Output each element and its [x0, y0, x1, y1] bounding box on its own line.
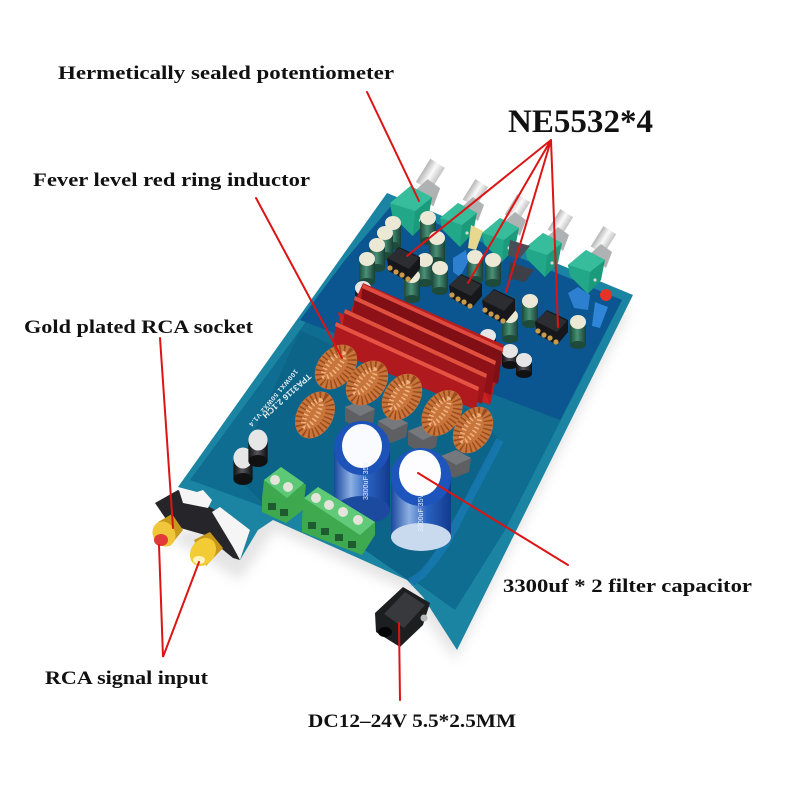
- label: DC jack: DC12–24V 5.5*2.5MM: [308, 711, 516, 732]
- filter capacitors: 3300uF 35V: [363, 462, 370, 500]
- RCA sockets: [148, 487, 250, 571]
- label: potentiometer: Hermetically sealed potentiometer: [58, 63, 395, 84]
- board shadow: [165, 300, 630, 660]
- arrow: inductor: [256, 198, 342, 358]
- filter capacitors: 3300uF 35V: [418, 494, 425, 532]
- silkscreen text: TPA3116 2.1CH: [261, 372, 313, 420]
- arrow: RCA signal input: [159, 545, 199, 657]
- label: filter capacitor: 3300uf * 2 filter capacitor: [503, 576, 753, 597]
- black capacitors: [233, 281, 532, 485]
- silkscreen text: 100WX1 50WX2 V1.4: [247, 368, 299, 428]
- arrow: potentiometer: [367, 92, 419, 201]
- arrow: RCA socket: [160, 338, 173, 528]
- label: NE5532 chips: NE5532*4: [508, 104, 653, 140]
- copper inductors: [287, 336, 502, 461]
- arrow: DC jack: [399, 623, 400, 700]
- DC jack: [375, 587, 430, 647]
- red heatsink: [332, 283, 504, 410]
- arrow: filter capacitor: [418, 473, 568, 565]
- PCB board: [178, 193, 633, 650]
- label: inductor: Fever level red ring inductor: [33, 170, 311, 191]
- potentiometers: [390, 159, 616, 294]
- red callout arrows: [159, 92, 568, 700]
- green terminal blocks: [262, 467, 375, 555]
- label: RCA socket: Gold plated RCA socket: [24, 317, 254, 338]
- film capacitors and LED: [453, 240, 612, 328]
- chokes: [345, 401, 471, 478]
- label: RCA signal input: RCA signal input: [45, 668, 209, 689]
- filter capacitors: [334, 421, 451, 551]
- arrow: chips: [407, 140, 558, 327]
- preamp capacitors: [359, 211, 586, 349]
- op-amp chips: [387, 247, 568, 345]
